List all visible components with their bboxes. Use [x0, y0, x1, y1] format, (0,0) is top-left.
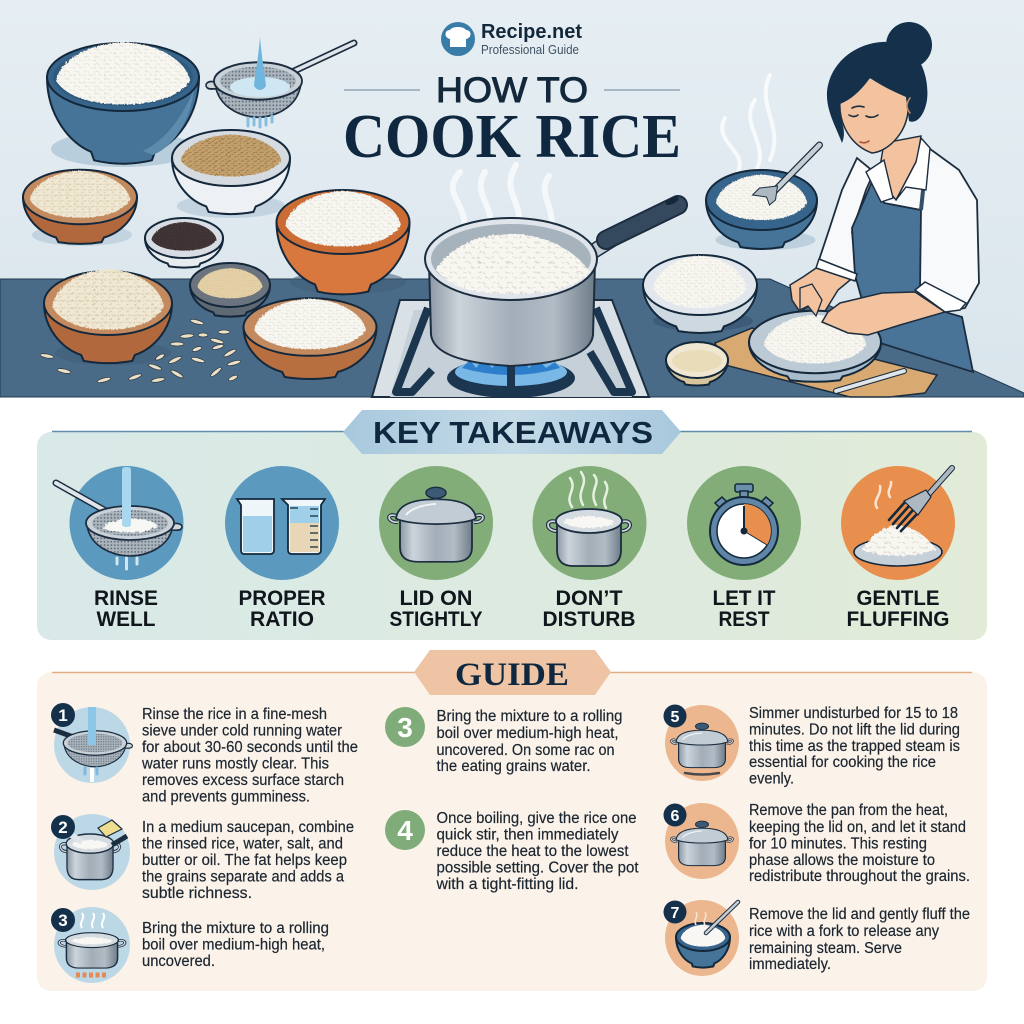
counter top: [0, 279, 1024, 397]
takeaway: don't disturb: DISTURB: [542, 608, 636, 631]
steam above pot: [453, 165, 552, 238]
step 2 text: [142, 819, 354, 902]
step 2 text: the rinsed rice, water, salt, and: [142, 836, 343, 852]
badge 7: [664, 900, 686, 924]
cuff: left: [816, 259, 857, 281]
step 3 (middle column): [385, 707, 622, 775]
icon: chef hat: [441, 22, 475, 56]
bowl: blue with fork: [706, 145, 820, 250]
step 4 text: [435, 810, 639, 893]
step 4: [385, 810, 639, 893]
takeaway: don't disturb: [532, 466, 646, 631]
step 3 (middle column): 3: [397, 712, 413, 743]
step 1 text: water runs mostly clear. This: [141, 756, 329, 772]
badge 5: [664, 704, 686, 728]
step 4 text: quick stir, then immediately: [436, 826, 619, 844]
takeaway: proper ratio: [225, 466, 339, 631]
step 2 text: In a medium saucepan, combine: [142, 819, 354, 836]
arm: left: [790, 264, 855, 316]
takeaway: rinse well: [56, 466, 184, 631]
step 3 text: uncovered.: [142, 953, 215, 970]
step 4 text: with a tight-fitting lid.: [435, 876, 578, 893]
takeaway: gentle fluffing: [841, 466, 955, 631]
step 3 middle text: [436, 708, 622, 775]
step 3 text: Bring the mixture to a rolling: [142, 920, 329, 937]
step 7: [664, 900, 970, 976]
takeaway: proper ratio: PROPER: [238, 587, 326, 610]
bowl: being seasoned: [749, 311, 881, 382]
brand logo: Professional Guide: [481, 43, 579, 57]
takeaway: let it rest: LET IT: [712, 587, 776, 610]
bowl: pale with white rice: [643, 255, 757, 333]
badge 6: [664, 804, 686, 826]
spoon on board: [836, 371, 904, 391]
step 7 text: [749, 906, 970, 973]
bowl: grey with golden rice: [190, 263, 270, 317]
heading: key takeaways: KEY TAKEAWAYS: [373, 415, 653, 450]
bowl: blue with white rice: [47, 42, 199, 167]
badge 6: 6: [671, 808, 680, 825]
head: [840, 76, 908, 153]
badge 3: [51, 908, 75, 932]
step 6 text: for 10 minutes. This resting: [749, 836, 927, 852]
step 7 text: immediately.: [749, 956, 831, 973]
gas stove: [372, 300, 649, 398]
step 4 text: Once boiling, give the rice one: [436, 810, 636, 827]
collar: [866, 138, 930, 202]
takeaway: rinse well: RINSE: [94, 587, 158, 610]
step 5: [664, 704, 960, 788]
brand logo: Recipe.net: [481, 21, 582, 43]
takeaway: rinse well: WELL: [96, 608, 156, 631]
takeaway: lid on tightly: LID ON: [400, 587, 472, 610]
step 2 text: subtle richness.: [142, 885, 252, 902]
step 3 text: boil over medium-high heat,: [142, 936, 325, 954]
step 7 text: rice with a fork to release any: [749, 923, 939, 940]
bowl: small with black rice: [145, 218, 223, 268]
takeaway: gentle fluffing: FLUFFING: [846, 608, 950, 631]
heading: guide: [414, 650, 611, 695]
step 5 text: minutes. Do not lift the lid during: [749, 722, 960, 738]
saucepan with rice: [425, 195, 680, 366]
steam above serving bowl: [722, 75, 774, 172]
bowl: brown with white grains: [244, 298, 376, 379]
right shirt and sleeve: [880, 146, 979, 312]
badge 7: 7: [671, 905, 680, 922]
step 4: 4: [397, 815, 413, 846]
title: [343, 71, 681, 171]
heading: key takeaways: [343, 410, 681, 454]
panel: key takeaways: [37, 410, 987, 640]
step 3 middle text: the eating grains water.: [436, 758, 590, 775]
step 2 combine: [51, 814, 354, 902]
title: HOW TO: [436, 71, 588, 110]
hair and bun: [827, 22, 932, 143]
step 1 text: for about 30-60 seconds until the: [142, 739, 358, 756]
bowl: brown with long grain rice: [44, 269, 172, 365]
bowl: orange with white rice: [276, 190, 410, 294]
badge 1: [51, 703, 75, 727]
bowl: white with brown rice: [172, 130, 290, 218]
small bowl of butter: [666, 342, 728, 386]
apron: [852, 177, 973, 372]
step 4 text: reduce the heat to the lowest: [436, 843, 629, 860]
takeaway: don't disturb: DON’T: [556, 587, 623, 610]
takeaway: proper ratio: RATIO: [250, 608, 314, 631]
title: COOK RICE: [343, 103, 681, 171]
step 1 text: and prevents gumminess.: [142, 788, 310, 806]
step 6 text: Remove the pan from the heat,: [749, 802, 948, 819]
step 1 text: [141, 706, 358, 806]
badge 3: 3: [58, 911, 68, 930]
badge 2: [51, 815, 75, 839]
step 5 text: [749, 705, 960, 788]
scattered rice grains: [40, 318, 241, 384]
step 4 text: possible setting. Cover the pot: [436, 860, 639, 876]
icon: strainer under water: [206, 37, 354, 127]
step 6 text: redistribute throughout the grains.: [749, 868, 970, 885]
step 6 text: phase allows the moisture to: [749, 852, 935, 869]
left sleeve: [819, 158, 874, 275]
step 7 text: Remove the lid and gently fluff the: [749, 906, 970, 923]
step 3 middle text: uncovered. On some rac on: [436, 742, 614, 759]
step 1 text: removes excess surface starch: [142, 772, 344, 789]
bowl: brown with cream rice: [23, 170, 137, 246]
step 5 text: Simmer undisturbed for 15 to 18: [749, 705, 958, 722]
takeaway: lid on tightly: [379, 466, 493, 631]
step 5 text: this time as the trapped steam is: [749, 738, 960, 755]
apron strap: [921, 152, 927, 210]
step 3 middle text: Bring the mixture to a rolling: [436, 708, 622, 725]
takeaway: let it rest: REST: [718, 608, 770, 631]
heading: guide: GUIDE: [455, 657, 569, 693]
step 2 text: butter or oil. The fat helps keep: [142, 852, 347, 869]
hands over bowl: [800, 282, 966, 335]
facial features: [849, 98, 910, 143]
takeaway: lid on tightly: STIGHTLY: [390, 608, 482, 631]
step 2 text: the grains separate and adds a: [142, 868, 344, 886]
step 3 middle text: boil over medium-high heat,: [436, 725, 618, 742]
neck: [878, 136, 921, 200]
cutting board: [715, 328, 937, 397]
step 3 text: [142, 920, 329, 970]
badge 5: 5: [671, 709, 680, 726]
step 1 text: Rinse the rice in a fine-mesh: [142, 706, 327, 723]
step 7 text: remaining steam. Serve: [749, 940, 902, 957]
badge 1: 1: [58, 706, 68, 725]
panel: guide: [37, 650, 987, 991]
step 3 boil (left column): [51, 907, 329, 983]
step 5 text: essential for cooking the rice: [749, 754, 936, 771]
step 1 text: sieve under cold running water: [142, 722, 342, 740]
woman cooking: [790, 22, 979, 372]
hero illustration panel: [0, 0, 1024, 398]
step 6: [664, 802, 970, 885]
takeaway: let it rest: [687, 466, 801, 631]
step 5 text: evenly.: [749, 770, 794, 788]
takeaway: gentle fluffing: GENTLE: [856, 587, 940, 610]
brand logo: [441, 21, 582, 57]
step 6 text: [749, 802, 970, 885]
step 1 rinse: [51, 703, 358, 806]
badge 2: 2: [58, 818, 68, 837]
step 6 text: keeping the lid on, and let it stand: [749, 819, 966, 836]
